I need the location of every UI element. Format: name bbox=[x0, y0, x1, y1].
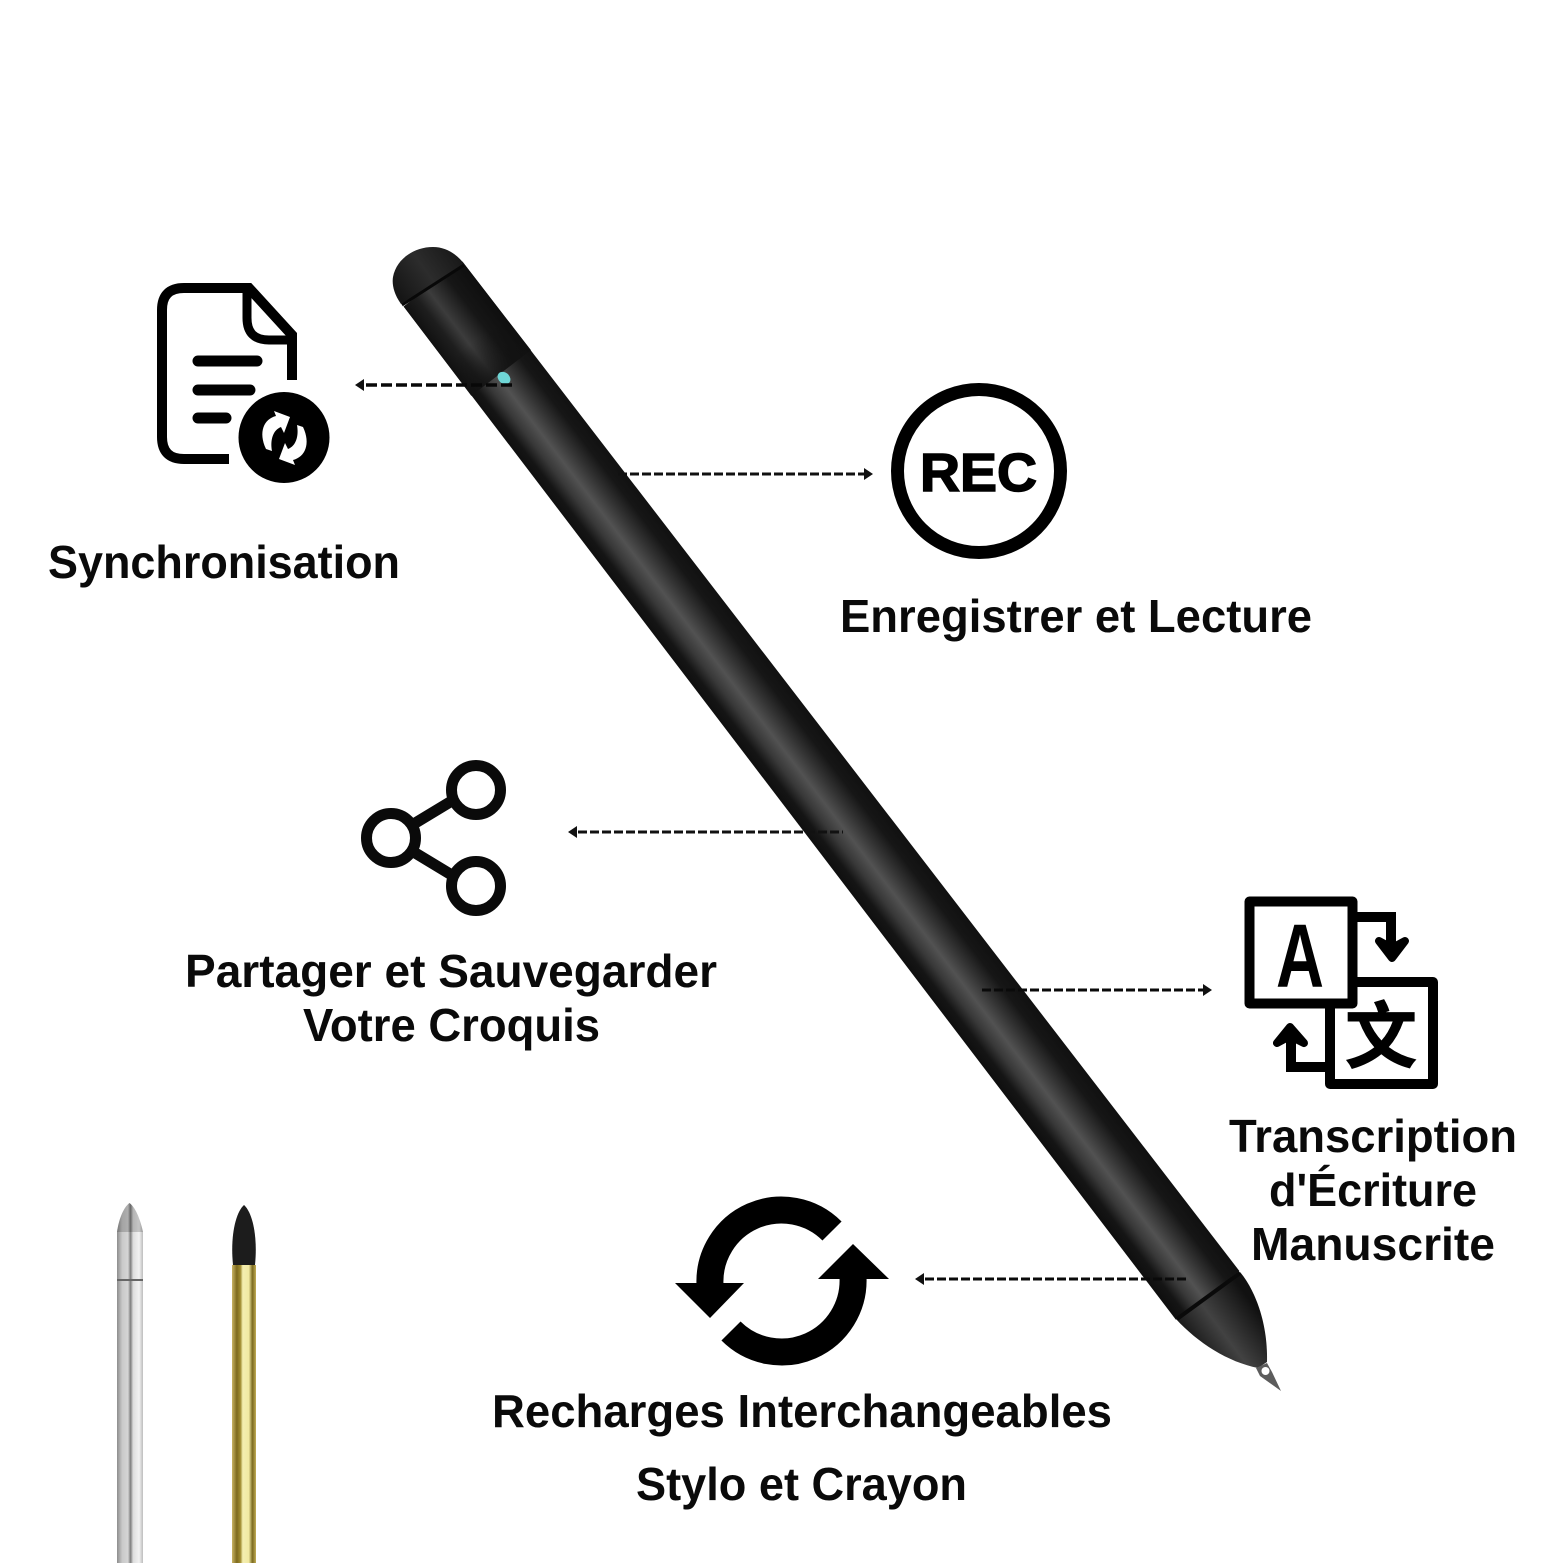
refill: silver bbox=[117, 1203, 143, 1563]
label: synchronisation: Synchronisation bbox=[48, 536, 400, 588]
arrow: to transcription bbox=[982, 984, 1212, 996]
label: handwriting transcription: Manuscrite bbox=[1251, 1218, 1495, 1270]
label: interchangeable refills: Stylo et Crayon bbox=[636, 1458, 967, 1510]
label: interchangeable refills bbox=[492, 1385, 1112, 1510]
icon: translation: 文 bbox=[1345, 998, 1417, 1078]
label: handwriting transcription bbox=[1229, 1110, 1517, 1270]
label: share and save: Partager et Sauvegarder bbox=[185, 945, 717, 997]
icon: share bbox=[366, 766, 500, 910]
icon: translation bbox=[1250, 902, 1433, 1084]
arrow: to record bbox=[618, 468, 873, 480]
icon: record bbox=[898, 390, 1060, 552]
LED indicator bbox=[495, 369, 513, 387]
label: interchangeable refills: Recharges Interchangeables bbox=[492, 1385, 1112, 1437]
pen end cap bbox=[393, 247, 465, 304]
pen bbox=[393, 247, 1281, 1391]
icon: record: REC bbox=[920, 443, 1037, 503]
icon: translation: A bbox=[1276, 907, 1324, 1007]
label: share and save bbox=[185, 945, 717, 1051]
label: handwriting transcription: Transcription bbox=[1229, 1110, 1517, 1162]
arrow: to synchronisation bbox=[355, 379, 513, 391]
refill: gold bbox=[232, 1205, 256, 1563]
arrow: to share bbox=[568, 826, 843, 838]
label: record and playback: Enregistrer et Lecture bbox=[840, 590, 1312, 642]
pen barrel bbox=[401, 260, 1239, 1320]
icon: document sync bbox=[162, 288, 330, 483]
arrow: to refills bbox=[915, 1273, 1189, 1285]
label: share and save: Votre Croquis bbox=[303, 999, 600, 1051]
icon: refill swap arrows bbox=[675, 1210, 889, 1352]
pen nose bbox=[1176, 1272, 1267, 1368]
label: handwriting transcription: d'Écriture bbox=[1269, 1164, 1477, 1216]
pen metal tip bbox=[1256, 1363, 1281, 1391]
